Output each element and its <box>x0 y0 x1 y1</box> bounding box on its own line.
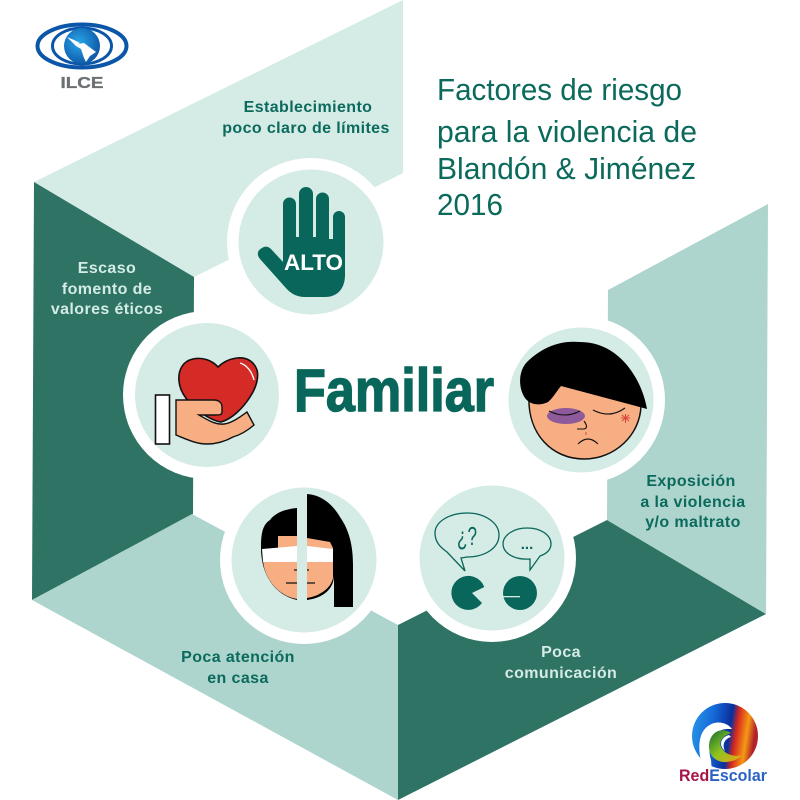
text: dots: ... <box>521 536 533 553</box>
icon: bruise <box>547 408 585 424</box>
label: exposición: a la violencia <box>640 494 746 511</box>
label: escaso fomento: fomento de <box>62 281 152 298</box>
circle: bruised face <box>508 328 654 472</box>
panel: exposición a la violencia <box>607 204 768 614</box>
title: 2016 <box>437 188 503 222</box>
panel: escaso fomento de valores éticos <box>32 182 194 600</box>
icon: left half <box>261 508 297 600</box>
title <box>437 73 697 222</box>
icon: eyes, nose, mouth <box>549 408 625 444</box>
heading: Familiar: Familiar <box>294 357 494 424</box>
title: Blandón & Jiménez <box>437 152 696 186</box>
logo: RedEscolar: RedEscolar <box>679 766 767 785</box>
label: poca comunicación: Poca <box>541 644 581 661</box>
panel: establecimiento poco claro de límites <box>34 0 403 277</box>
icon: face <box>529 375 641 459</box>
label: establecimiento: Establecimiento <box>244 99 372 116</box>
icon: hair <box>520 342 647 409</box>
icon: closed mouth <box>503 576 537 610</box>
icon: speech bubble large <box>435 513 499 571</box>
icon: wound <box>586 414 630 435</box>
label: escaso fomento: Escaso <box>78 260 136 277</box>
circle: communication <box>420 486 564 630</box>
label: exposición: y/o maltrato <box>645 514 741 531</box>
logo: ILCE: ILCE <box>60 75 104 92</box>
icon: facial marks <box>286 570 315 583</box>
icon: right half <box>307 494 353 607</box>
label: exposición: Exposición <box>646 473 736 490</box>
panel: poca atención en casa <box>32 514 398 800</box>
white circle backings <box>123 158 665 644</box>
circle: blindfolded face <box>232 488 376 632</box>
icon: hand <box>258 187 345 297</box>
title: para la violencia de <box>437 115 697 149</box>
logo: ILCE <box>38 24 126 92</box>
logo: RedEscolar <box>679 703 767 785</box>
label: escaso fomento: valores éticos <box>51 301 163 318</box>
icon: speech bubble small <box>503 528 551 570</box>
icon: heart <box>179 358 258 422</box>
text: question: ¿? <box>457 521 477 551</box>
icon: hand <box>176 400 254 444</box>
circle: alto <box>238 170 384 314</box>
icon: pacman <box>451 576 484 610</box>
label: poca atención: Poca atención <box>181 649 295 666</box>
mouth line <box>503 596 520 597</box>
label: poca atención: en casa <box>207 670 269 687</box>
icon: cuff <box>156 395 170 444</box>
label: poca comunicación: comunicación <box>505 665 617 682</box>
panel: poca comunicación <box>398 520 766 800</box>
circle: heart in hand <box>135 323 279 467</box>
title: Factores de riesgo <box>437 73 682 107</box>
label: establecimiento: poco claro de límites <box>222 120 390 137</box>
icon text: ALTO: ALTO <box>284 250 343 275</box>
